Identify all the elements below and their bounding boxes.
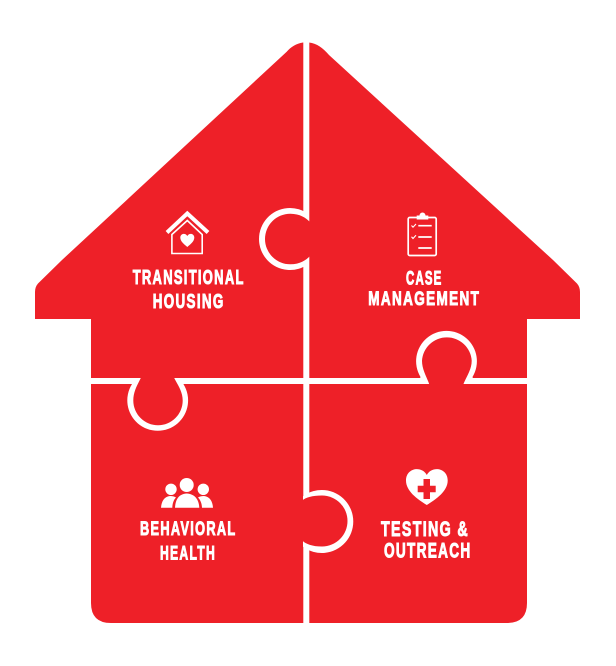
panel: transitional housing	[133, 214, 245, 313]
panel: behavioral health	[140, 478, 236, 564]
heading: testing and outreach	[381, 517, 472, 562]
heading: behavioral health: HEALTH	[160, 542, 216, 564]
heading: transitional housing: HOUSING	[153, 291, 225, 313]
heading: testing and outreach: OUTREACH	[384, 538, 472, 562]
panel: case management	[368, 212, 480, 310]
icon: heart with cross	[406, 469, 448, 505]
heading: behavioral health: BEHAVIORAL	[140, 518, 236, 540]
icon: house with heart	[167, 214, 208, 254]
heading: transitional housing	[133, 267, 245, 313]
icon: clipboard	[408, 212, 436, 256]
heading: behavioral health	[140, 518, 236, 564]
icon: three people	[161, 478, 213, 508]
heading: case management: CASE	[406, 267, 442, 289]
puzzle seams	[91, 38, 527, 626]
heading: case management: MANAGEMENT	[368, 288, 480, 310]
panel: red house puzzle	[35, 38, 580, 626]
heading: transitional housing: TRANSITIONAL	[133, 267, 245, 289]
heading: case management	[368, 267, 480, 310]
heading: testing and outreach: TESTING &	[381, 517, 469, 541]
house shape	[35, 42, 580, 623]
panel: testing and outreach	[381, 469, 472, 562]
